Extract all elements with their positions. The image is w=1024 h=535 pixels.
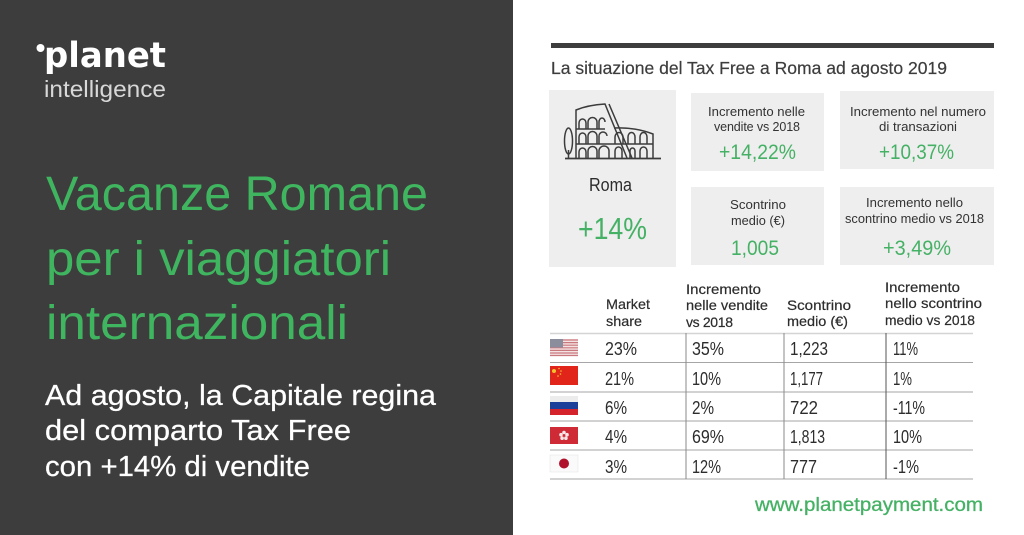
- icon: Hong Kong flag: [550, 427, 578, 444]
- panel: incremento vendite: Incremento nelle: [708, 105, 805, 119]
- row: Japan: 3%: [605, 457, 627, 477]
- panel: incremento scontrino medio: +3,49%: [883, 237, 951, 260]
- logo: planet intelligence: planet: [44, 36, 166, 76]
- heading: [46, 168, 428, 350]
- row: Russia: 6%: [605, 398, 627, 418]
- panel: scontrino medio: 1,005: [731, 237, 779, 260]
- subheading text block: con +14% di vendite: [45, 451, 310, 483]
- table header: vs 2018: [686, 314, 733, 330]
- logo: planet intelligence: [36, 36, 166, 102]
- website link text: www.planetpayment.com: [754, 495, 983, 516]
- row: Russia: 722: [790, 398, 818, 418]
- row: USA: [605, 339, 918, 359]
- table header: share: [606, 313, 642, 329]
- label: Roma: Roma: [589, 175, 633, 195]
- row: Hong Kong: [605, 427, 922, 447]
- subheading text block: Ad agosto, la Capitale regina: [45, 380, 437, 412]
- heading: internazionali: [46, 297, 348, 350]
- panel: incremento scontrino medio: [840, 187, 994, 265]
- panel: incremento vendite: vendite vs 2018: [714, 120, 800, 134]
- subheading text block: [45, 380, 437, 483]
- heading: per i viaggiatori: [46, 233, 391, 286]
- table: nationalities: [550, 279, 982, 479]
- row: Hong Kong: 1,813: [790, 427, 825, 447]
- row: USA: 35%: [692, 339, 724, 359]
- row: Hong Kong: 4%: [605, 427, 627, 447]
- row: Russia: [605, 398, 925, 418]
- table header: Scontrino: [787, 297, 851, 313]
- row: Japan: -1%: [893, 457, 919, 477]
- row: Russia: 2%: [692, 398, 714, 418]
- section title: La situazione del Tax Free a Roma ad agosto 2019: [551, 58, 947, 78]
- panel: Roma: [549, 90, 676, 267]
- panel: incremento transazioni: [840, 91, 994, 169]
- row: China: 1%: [893, 369, 912, 389]
- row: China: 1,177: [790, 369, 823, 389]
- icon: Russia flag: [550, 396, 578, 415]
- row: China: 10%: [692, 369, 721, 389]
- row: USA: 23%: [605, 339, 637, 359]
- panel: scontrino medio: medio (€): [731, 214, 785, 228]
- panel: incremento transazioni: Incremento nel numero: [850, 105, 986, 119]
- row: Hong Kong: 69%: [692, 427, 724, 447]
- icon: Colosseum: [564, 104, 661, 158]
- table header: Incremento: [686, 281, 761, 297]
- row: Japan: [605, 457, 919, 477]
- top rule: [551, 43, 994, 48]
- logo: planet intelligence: intelligence: [44, 76, 166, 102]
- heading: Vacanze Romane: [46, 168, 428, 221]
- subheading text block: del comparto Tax Free: [45, 415, 351, 447]
- row: Hong Kong: 10%: [893, 427, 922, 447]
- table header: nelle vendite: [686, 297, 768, 313]
- table header: Market: [606, 296, 650, 312]
- panel: incremento scontrino medio: scontrino medio vs 2018: [845, 212, 984, 226]
- row: Russia: -11%: [893, 398, 925, 418]
- panel: incremento transazioni: di transazioni: [879, 120, 957, 134]
- panel: scontrino medio: [691, 187, 824, 265]
- row: Japan: 777: [790, 457, 817, 477]
- row: Japan: 12%: [692, 457, 721, 477]
- panel: incremento scontrino medio: Incremento nello: [866, 196, 963, 210]
- table header: medio vs 2018: [885, 312, 975, 328]
- row: USA: 1,223: [790, 339, 828, 359]
- table header: Incremento: [885, 279, 960, 295]
- icon: China flag: [550, 366, 578, 385]
- panel: incremento vendite: +14,22%: [719, 141, 796, 164]
- icon: USA flag: [550, 339, 578, 356]
- table header: [606, 279, 982, 330]
- row: China: 21%: [605, 369, 634, 389]
- row: USA: 11%: [893, 339, 918, 359]
- panel: incremento vendite: [691, 93, 824, 171]
- icon: Japan flag: [550, 455, 578, 472]
- table header: nello scontrino: [885, 295, 982, 311]
- panel: left dark background: [0, 0, 513, 535]
- value: +14%: +14%: [578, 211, 647, 246]
- row: China: [605, 369, 912, 389]
- table grid: [550, 333, 973, 479]
- panel: incremento transazioni: +10,37%: [879, 141, 954, 164]
- panel: scontrino medio: Scontrino: [730, 198, 786, 212]
- table header: medio (€): [787, 313, 848, 329]
